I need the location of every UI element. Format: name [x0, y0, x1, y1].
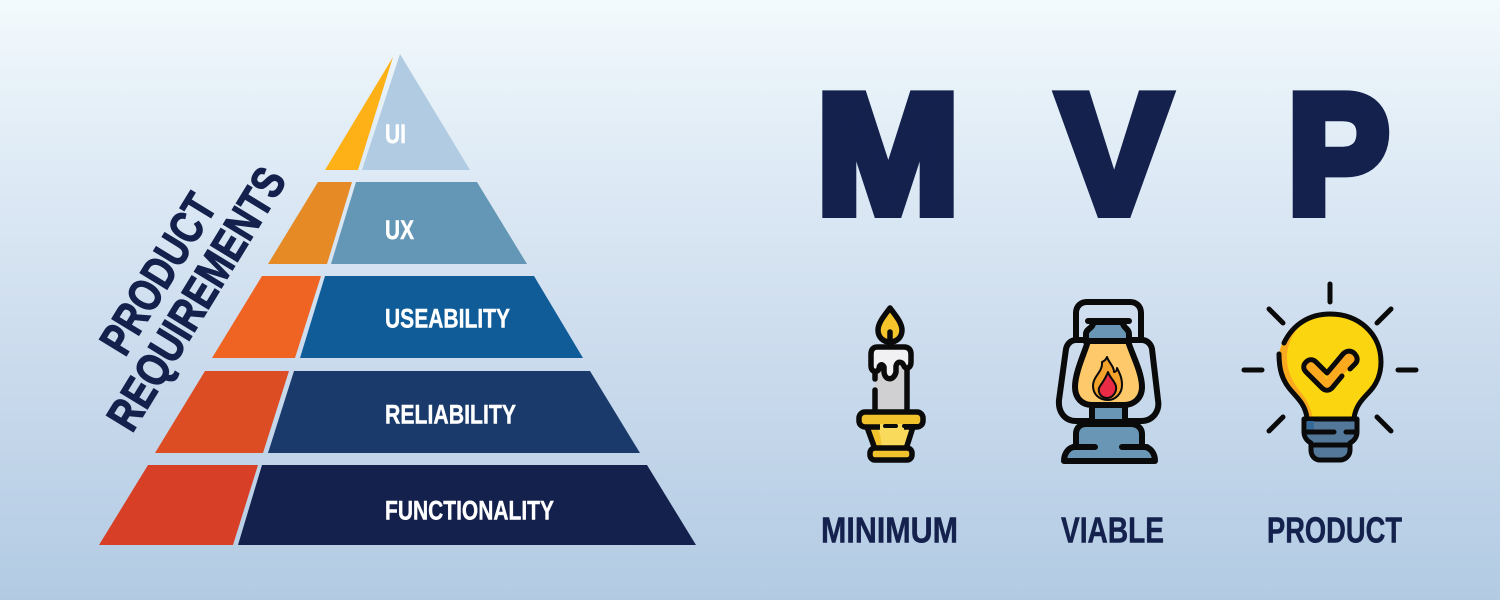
tier: Functionality: FUNCTIONALITY [385, 496, 554, 526]
icon: lantern [1059, 302, 1158, 461]
rotated label: product requirements: PRODUCT [89, 184, 227, 363]
tier: Functionality [99, 465, 696, 545]
tier: UX [268, 182, 527, 264]
tier: UI: UI [385, 119, 406, 149]
label: minimum: MINIMUM [821, 510, 958, 550]
label: viable: VIABLE [1061, 510, 1164, 550]
tier: UI [325, 54, 470, 170]
rotated label: product requirements: REQUIREMENTS [96, 158, 296, 439]
heading: M V P: V [1059, 60, 1169, 248]
label: product: PRODUCT [1267, 510, 1402, 550]
tier: UX: UX [385, 215, 414, 245]
heading: M V P [817, 60, 1389, 248]
rotated label: product requirements [89, 158, 296, 439]
tier: Useability [212, 276, 583, 358]
tier: Useability: USEABILITY [385, 304, 510, 334]
icon: candle [859, 308, 923, 460]
pyramid [99, 54, 696, 545]
tier: Reliability [155, 371, 640, 453]
heading: M V P: P [1288, 60, 1389, 248]
icon: light bulb [1244, 284, 1416, 460]
tier: Reliability: RELIABILITY [385, 400, 516, 430]
heading: M V P: M [817, 60, 959, 248]
